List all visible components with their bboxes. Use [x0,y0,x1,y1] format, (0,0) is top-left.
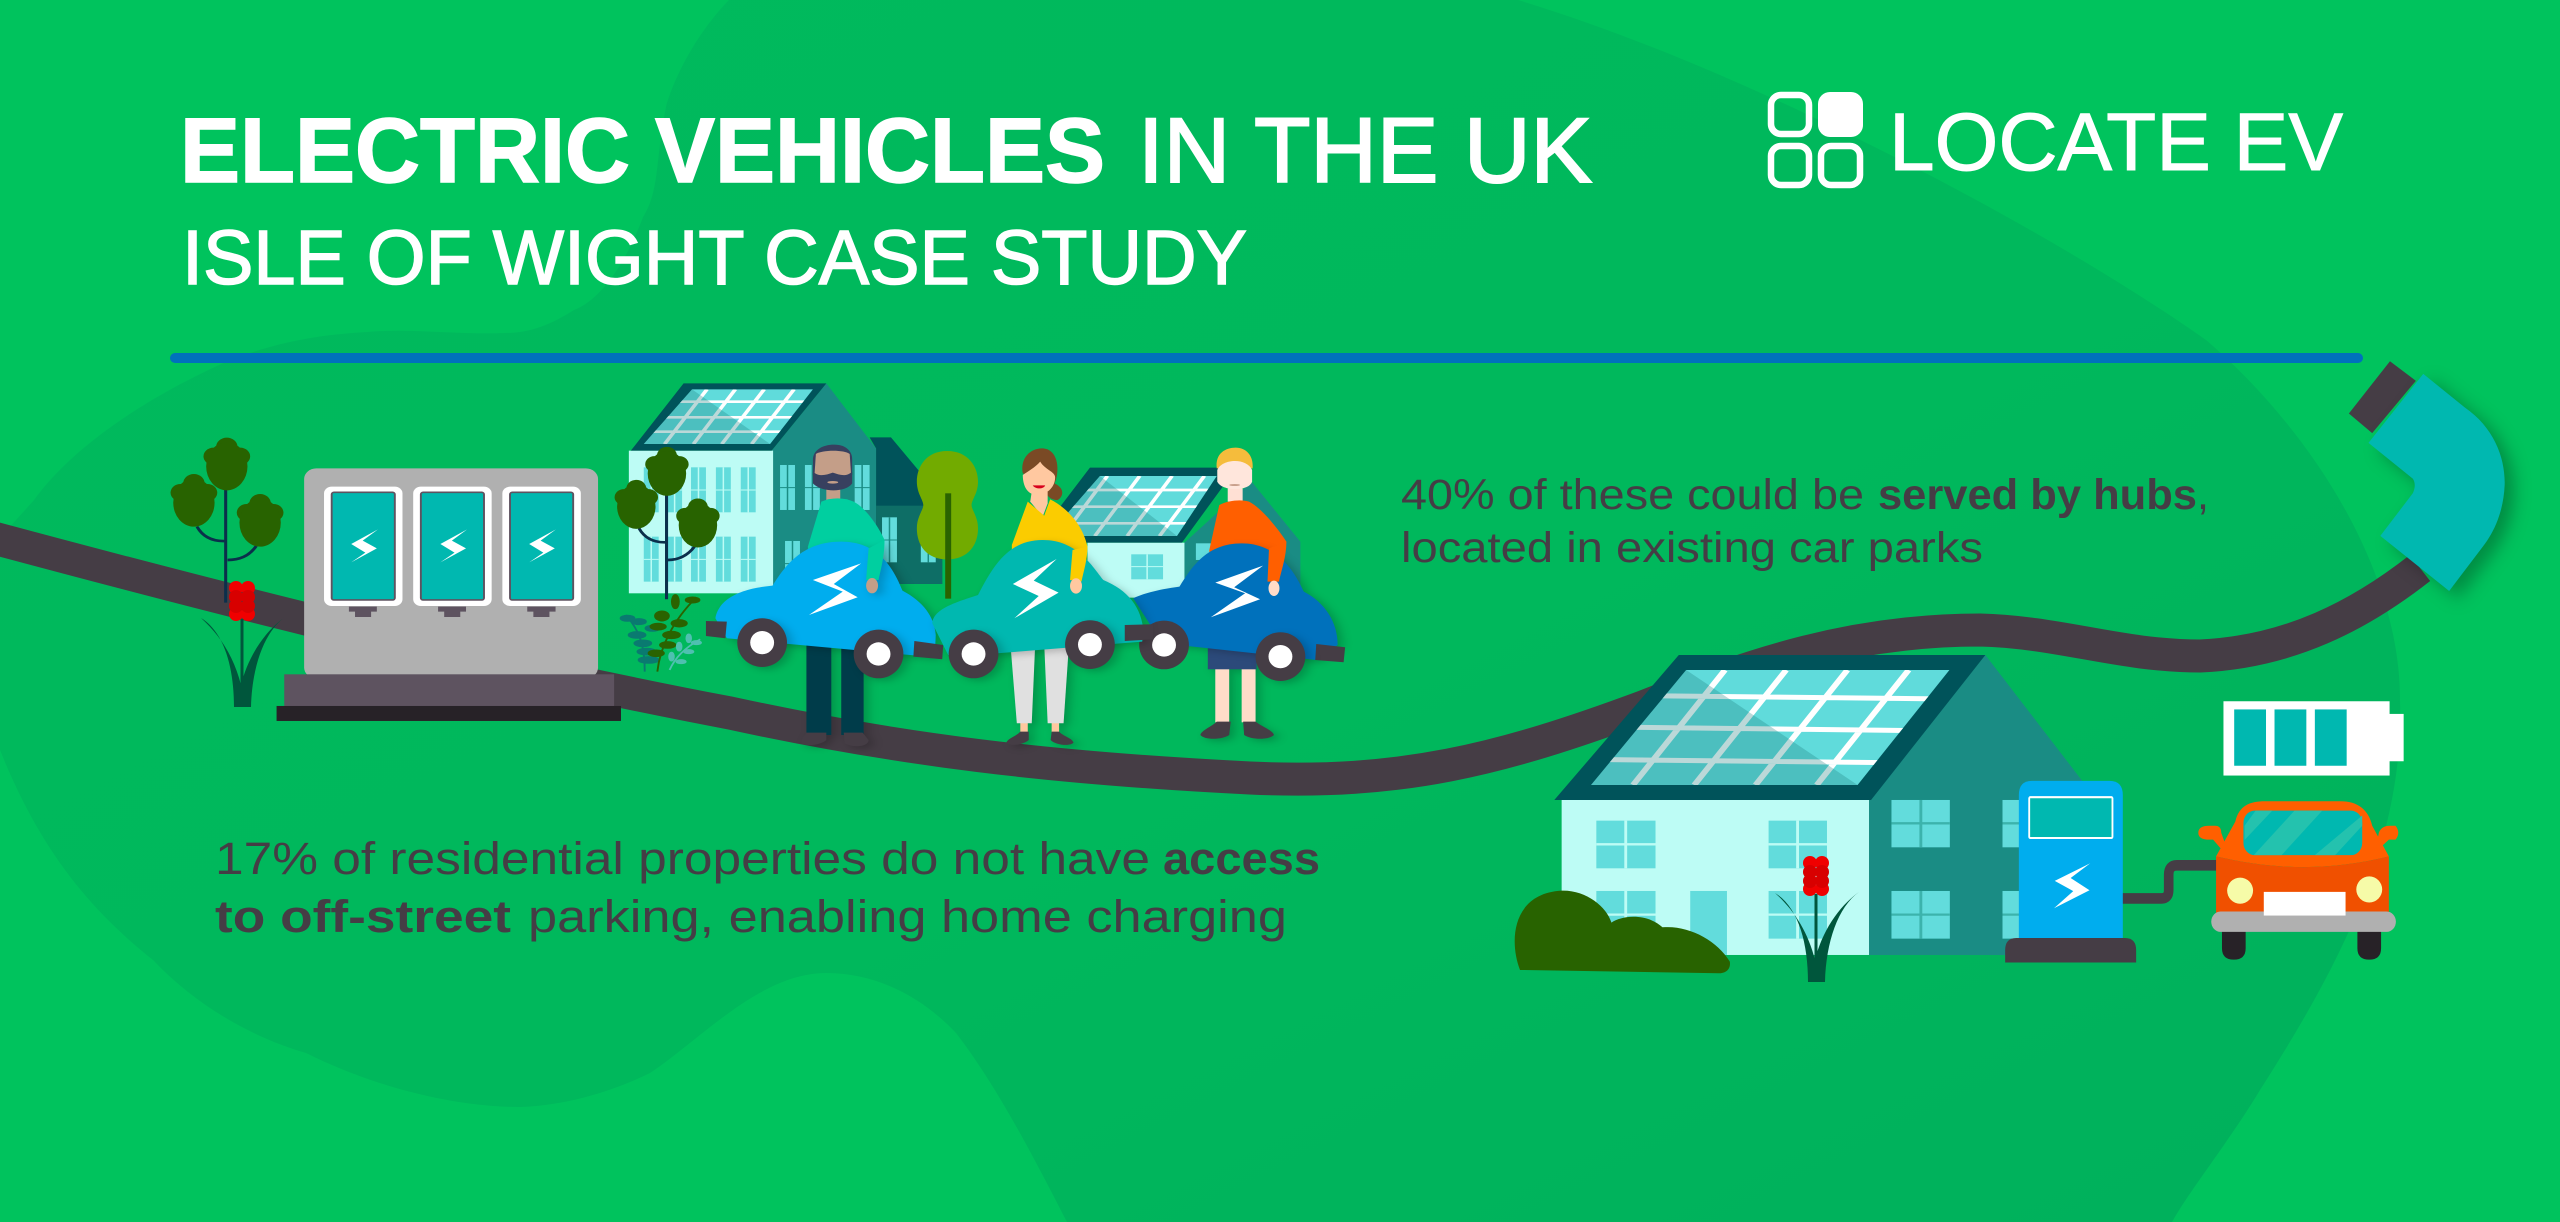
fern plant [621,595,701,672]
subtitle: ISLE OF WIGHT CASE STUDY [182,215,1247,301]
round tree [917,451,978,599]
woman and teal car [932,448,1153,745]
charging post [2005,781,2219,963]
house group behind people [629,383,1300,599]
man in orange and dark blue car [1133,448,1345,739]
tree left [171,438,283,603]
charging hub [277,468,621,721]
text: 40 percent served by hubs: located in existing car parks [1401,524,1983,572]
flower left [201,581,285,707]
man with beard and blue car [706,445,943,746]
left scene: hub charging station and tree [171,438,621,721]
text: 40 percent served by hubs [1401,471,2209,572]
orange car [2198,801,2398,960]
text: 17 percent no off-street parking: access [1163,833,1320,884]
text: 40 percent served by hubs: 40% of these could be [1401,471,1864,519]
bush [1515,891,1730,973]
back house [870,437,942,584]
people with cars [706,445,1345,746]
small house [1033,468,1300,598]
battery [2223,701,2404,776]
text: 40 percent served by hubs: served by hubs [1878,471,2197,519]
solar house right [1515,655,2084,973]
text: 40 percent served by hubs: , [2197,471,2209,519]
text: 17 percent no off-street parking: to off-street [215,891,511,942]
plug [2349,361,2505,591]
tree beside big house [615,447,720,672]
title: IN THE UK [1138,100,1592,202]
text: 17 percent no off-street parking: parking, enabling home charging [528,891,1287,942]
divider line [170,353,2363,363]
big house [629,383,876,593]
logo: Locate EV: LOCATE EV [1889,97,2343,188]
text: 17 percent no off-street parking: 17% of residential properties do not have [215,833,1150,884]
cable [0,537,2420,779]
text: 17 percent no off-street parking [215,833,1320,942]
flower right [1775,856,1859,982]
title [180,100,1592,202]
title: ELECTRIC VEHICLES [180,100,1105,202]
